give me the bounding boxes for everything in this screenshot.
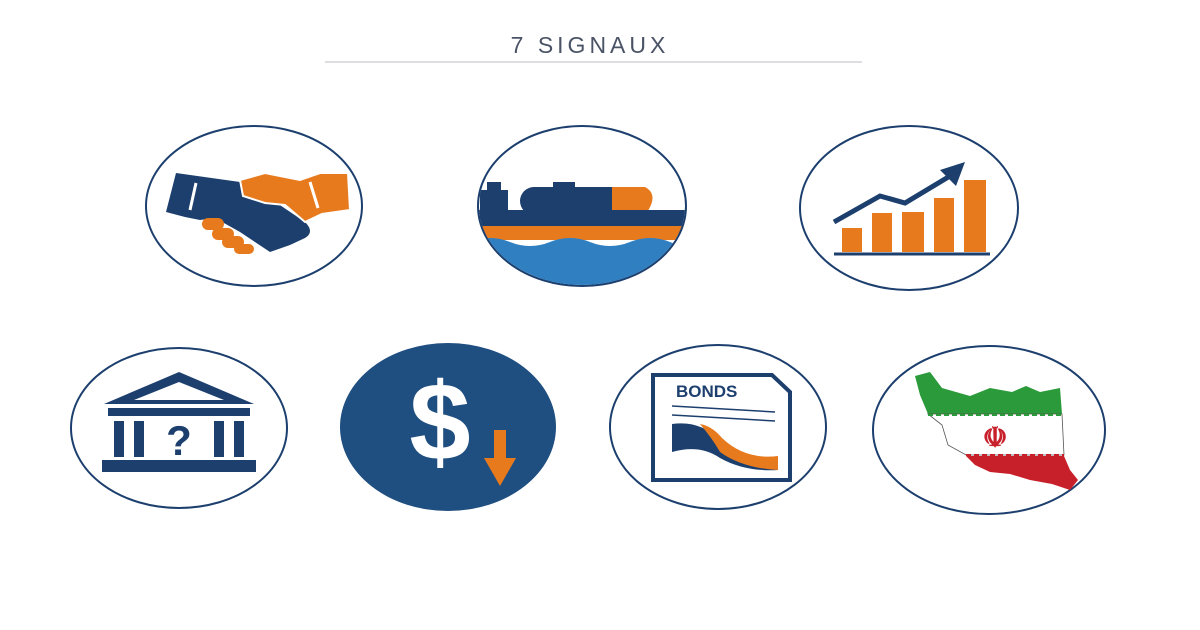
icon: tanker ship: [477, 125, 687, 287]
icon: bonds document: [610, 345, 826, 509]
icon: Iran flag map: ☫: [982, 422, 1008, 453]
icon: bank with question mark: ?: [166, 417, 192, 464]
icon: bar chart growth: [800, 126, 1018, 290]
icon: bank with question mark: [71, 348, 287, 508]
icon: dollar down: $: [409, 361, 471, 484]
icon: Iran flag map: [873, 346, 1105, 514]
icon: dollar down: [340, 343, 556, 511]
title: 7 SIGNAUX: [511, 32, 669, 58]
icon: bonds document: BONDS: [676, 382, 737, 401]
icon: handshake: [146, 126, 362, 286]
